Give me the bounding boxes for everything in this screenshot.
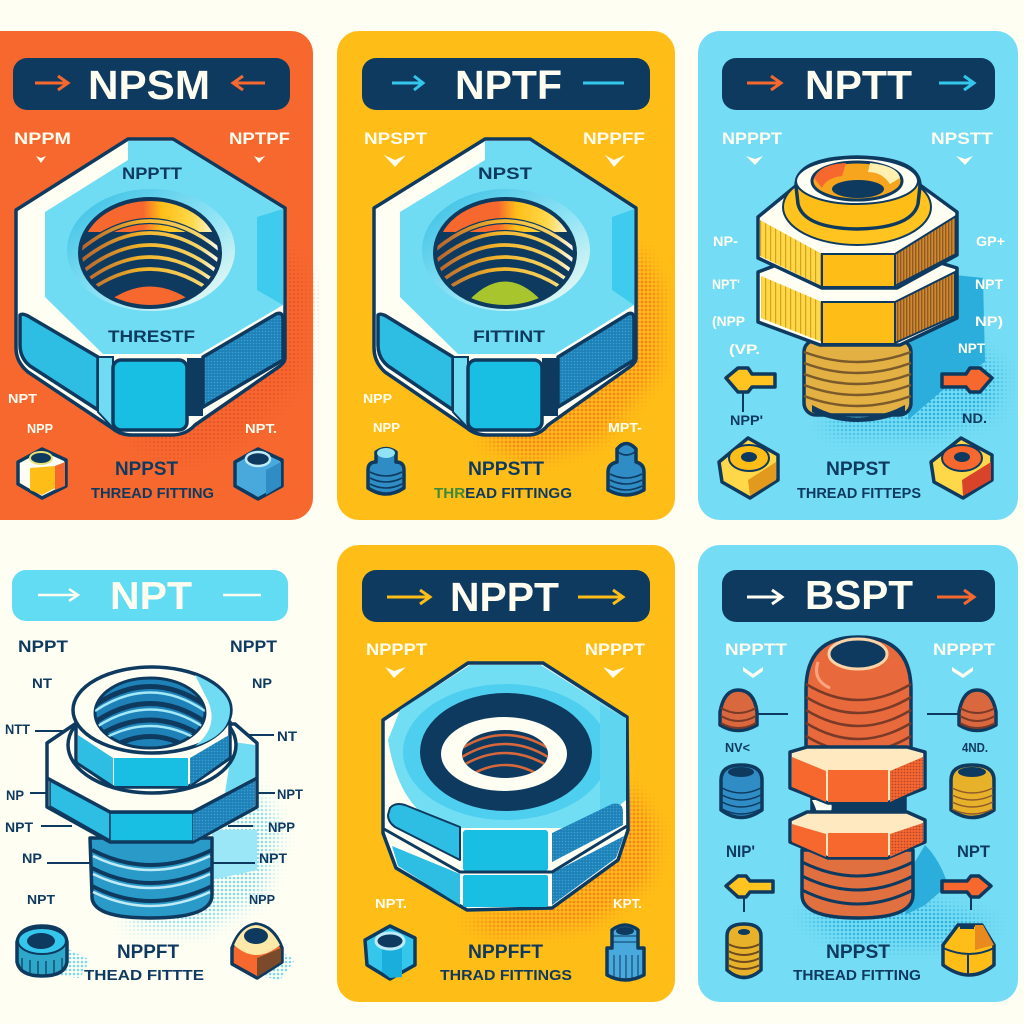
caption: NPPSTT: [468, 459, 544, 480]
small labels: [730, 410, 987, 428]
callout labels: (VP.: [729, 341, 760, 357]
callout labels: NPT.: [375, 896, 407, 911]
icon: orange threaded cap left: [720, 690, 757, 730]
nut labels: NPST: [478, 164, 533, 183]
caption: THREAD FITTING: [793, 967, 921, 984]
caption: NPPFT: [117, 942, 179, 963]
nut labels: FITTINT: [473, 327, 546, 346]
callout labels: [8, 129, 290, 436]
panel: BSPT: [698, 545, 1018, 1002]
threaded shank: [90, 838, 212, 918]
callout labels: NPPPT: [585, 640, 646, 659]
panel: NPTF: [337, 31, 675, 520]
icon: yellow threaded cylinder: [951, 765, 994, 818]
caption: NPPST: [826, 942, 890, 963]
callout labels: (NPP: [712, 313, 745, 329]
callout labels: NP: [6, 787, 24, 803]
icon: threaded plug right: [608, 444, 644, 495]
callout labels: NPPM: [14, 129, 71, 148]
header bar: NPSM: [88, 62, 210, 108]
threaded fitting body: [806, 637, 911, 765]
icon: orange nut: [931, 438, 992, 498]
callout labels: NPP: [363, 391, 392, 406]
header bar: NPPT: [450, 574, 559, 620]
threaded shank: [804, 340, 911, 422]
halftone shadow: [137, 254, 320, 462]
hex nut: [16, 139, 285, 435]
caption: THREAD FITTEPS: [797, 485, 921, 502]
callout labels: NP: [22, 850, 42, 866]
icon: yellow coupling: [943, 924, 994, 975]
header bar: [12, 570, 288, 621]
top collar: [796, 157, 920, 229]
small labels: NPP': [730, 412, 763, 428]
halftone shadow: [801, 894, 994, 955]
lower orange hex: [790, 812, 925, 858]
callout labels: NPSPT: [364, 129, 428, 148]
caption: THRAD FITTINGS: [440, 967, 572, 984]
upper hex: [758, 169, 957, 288]
caption: [793, 942, 921, 984]
callout labels: NPT: [5, 819, 33, 835]
header bar: [362, 570, 650, 622]
small labels: ND.: [962, 410, 987, 426]
callout labels: [5, 637, 303, 907]
callout labels: [725, 640, 996, 861]
halftone shadow: [821, 345, 1007, 446]
nut labels: [108, 164, 195, 346]
halftone shadow: [464, 784, 666, 943]
panel: NPT: [6, 570, 303, 980]
callout labels: NPT: [27, 892, 55, 907]
caption: [434, 459, 572, 502]
neck band: [812, 795, 905, 825]
hex nut: [374, 139, 636, 435]
callout labels: 4ND.: [962, 740, 988, 755]
caption: THEAD FITTTE: [84, 967, 204, 984]
icon: small nut left: [18, 449, 66, 498]
callout labels: NT: [277, 728, 297, 744]
lower hex: [758, 256, 957, 345]
caption: [91, 459, 214, 502]
hex nut: [383, 663, 628, 910]
callout labels: NPPTT: [725, 640, 788, 659]
icon: probe right: [942, 368, 992, 392]
callout labels: NPT': [712, 276, 740, 292]
header bar: NPT: [110, 575, 192, 618]
callout labels: [366, 640, 646, 911]
header bar: [362, 58, 650, 110]
callout labels: NPP: [268, 819, 295, 835]
callout labels: NPSTT: [931, 129, 994, 148]
caption: NPPST: [115, 459, 178, 480]
panel: NPTT: [698, 31, 1018, 520]
lower hex: [47, 724, 257, 842]
lower threads: [802, 850, 913, 918]
panel: NPSM: [0, 0, 320, 520]
caption: NPPFFT: [468, 942, 543, 963]
callout labels: NV<: [725, 740, 750, 755]
callout labels: [363, 129, 645, 435]
callout labels: NPT: [8, 391, 37, 406]
callout labels: NP): [975, 313, 1003, 329]
callout labels: NPTPF: [229, 129, 290, 148]
callout labels: NPP: [249, 892, 275, 907]
icon: orange threaded cap right: [959, 690, 996, 730]
icon: small nut right: [235, 449, 282, 499]
callout labels: NPT: [975, 276, 1003, 292]
callout labels: NPPPT: [722, 129, 783, 148]
callout labels: NIP': [726, 842, 755, 861]
icon: hex nut: [365, 926, 415, 979]
caption: THREAD FITTINGG: [434, 485, 572, 502]
callout labels: NPT: [277, 786, 303, 802]
caption: [797, 459, 921, 502]
panel: NPPT: [337, 545, 675, 1002]
callout labels: NPPPT: [366, 640, 428, 659]
callout labels: NP-: [713, 233, 738, 249]
icon: threaded fitting: [607, 925, 644, 980]
callout labels: NT: [32, 675, 52, 691]
nut labels: THRESTF: [108, 327, 195, 346]
callout labels: NPT: [957, 842, 991, 861]
upper orange hex: [790, 747, 925, 803]
header bar: [13, 58, 290, 110]
callout labels: NPT: [259, 850, 287, 866]
callout labels: NPP: [27, 421, 53, 436]
icon: yellow nut: [719, 438, 778, 498]
leader lines: [30, 731, 275, 863]
halftone shadow: [479, 245, 671, 468]
icon: probe right: [942, 876, 991, 897]
header bar: [722, 570, 995, 622]
caption: THREAD FITTING: [91, 485, 214, 502]
upper hex with bore: [68, 667, 236, 793]
icon: orange nut: [232, 924, 295, 980]
icon: probe left: [726, 368, 775, 412]
icon: probe left: [726, 876, 773, 897]
callout labels: KPT.: [613, 896, 642, 911]
nut labels: NPPTT: [122, 164, 183, 183]
callout labels: MPT-: [608, 420, 642, 435]
header bar: NPTF: [455, 62, 562, 108]
callout labels: NPT: [958, 340, 985, 356]
leader lines: [744, 714, 971, 912]
icon: cylinder nut: [17, 926, 90, 978]
halftone shadow: [118, 785, 291, 942]
nut labels: [473, 164, 546, 346]
callout labels: NPPT: [230, 637, 278, 656]
header bar: [722, 58, 995, 110]
callout labels: NPP: [373, 420, 400, 435]
callout labels: NTT: [5, 721, 30, 737]
threaded bore: [80, 198, 220, 320]
threaded bore: [462, 730, 548, 778]
threaded bore: [435, 198, 575, 315]
caption: [84, 942, 204, 984]
callout labels: NPPFF: [583, 129, 645, 148]
callout labels: NPT.: [245, 421, 277, 436]
header bar: BSPT: [805, 572, 913, 618]
callout labels: [712, 129, 1005, 357]
icon: threaded plug left: [368, 448, 404, 494]
callout labels: GP+: [976, 233, 1005, 249]
callout labels: NP: [252, 675, 272, 691]
callout labels: NPPT: [18, 637, 69, 656]
caption: NPPST: [826, 459, 890, 480]
icon: blue threaded cylinder: [721, 765, 762, 818]
caption: [440, 942, 572, 984]
icon: yellow threaded plug: [727, 924, 761, 978]
header bar: NPTT: [805, 62, 912, 108]
callout labels: NPPPT: [933, 640, 996, 659]
